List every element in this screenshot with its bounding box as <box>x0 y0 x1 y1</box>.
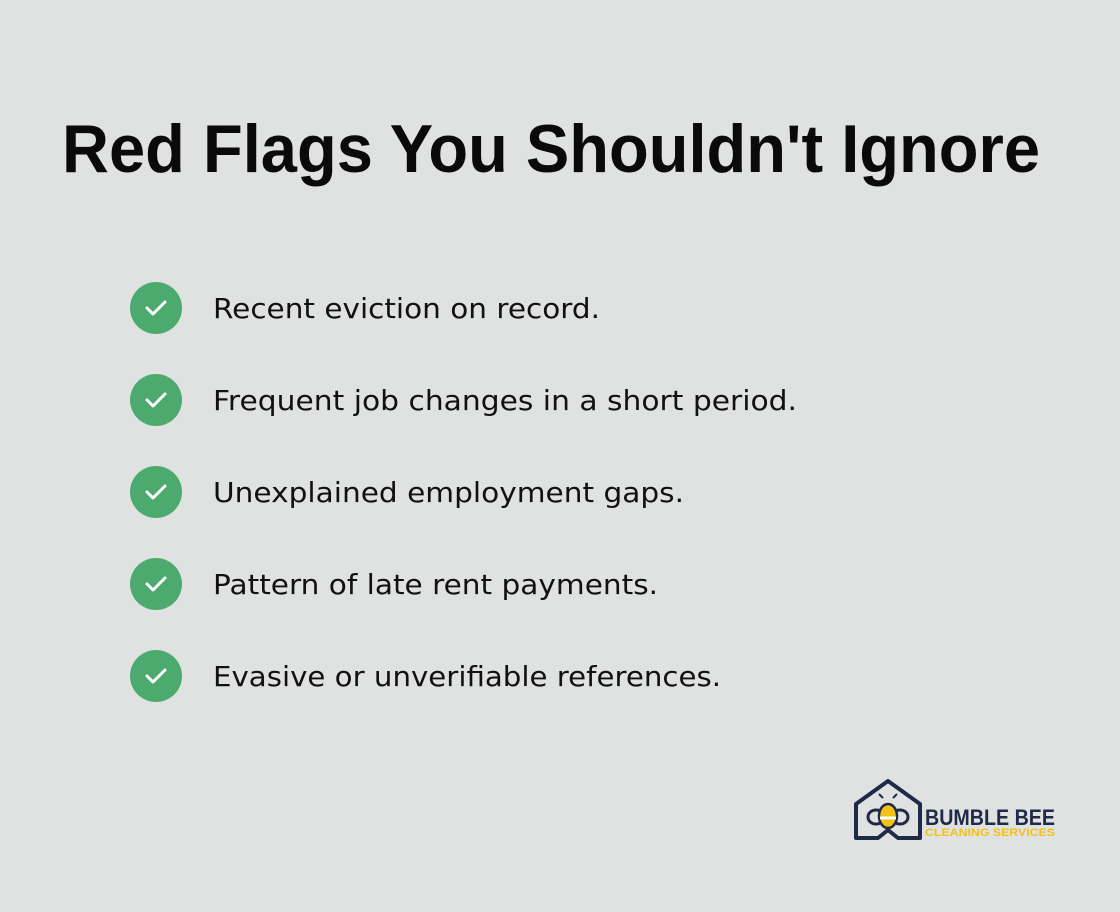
item 5: Evasive or unverifiable references. <box>213 660 721 693</box>
item 1 <box>130 282 600 334</box>
checklist <box>130 282 797 702</box>
item 4 <box>130 558 658 610</box>
item 3 <box>130 466 684 518</box>
logo: CLEANING SERVICES <box>925 827 1055 839</box>
item 3: Unexplained employment gaps. <box>213 476 684 509</box>
title: Red Flags You Shouldn't Ignore <box>62 111 1040 187</box>
item 1: Recent eviction on record. <box>213 292 600 325</box>
item 4: Pattern of late rent payments. <box>213 568 658 601</box>
logo text: BUMBLE BEE <box>925 805 1055 830</box>
item 5 <box>130 650 721 702</box>
item 2 <box>130 374 797 426</box>
icon: house with bee <box>856 781 920 838</box>
item 2: Frequent job changes in a short period. <box>213 384 797 417</box>
logo <box>856 781 1055 839</box>
